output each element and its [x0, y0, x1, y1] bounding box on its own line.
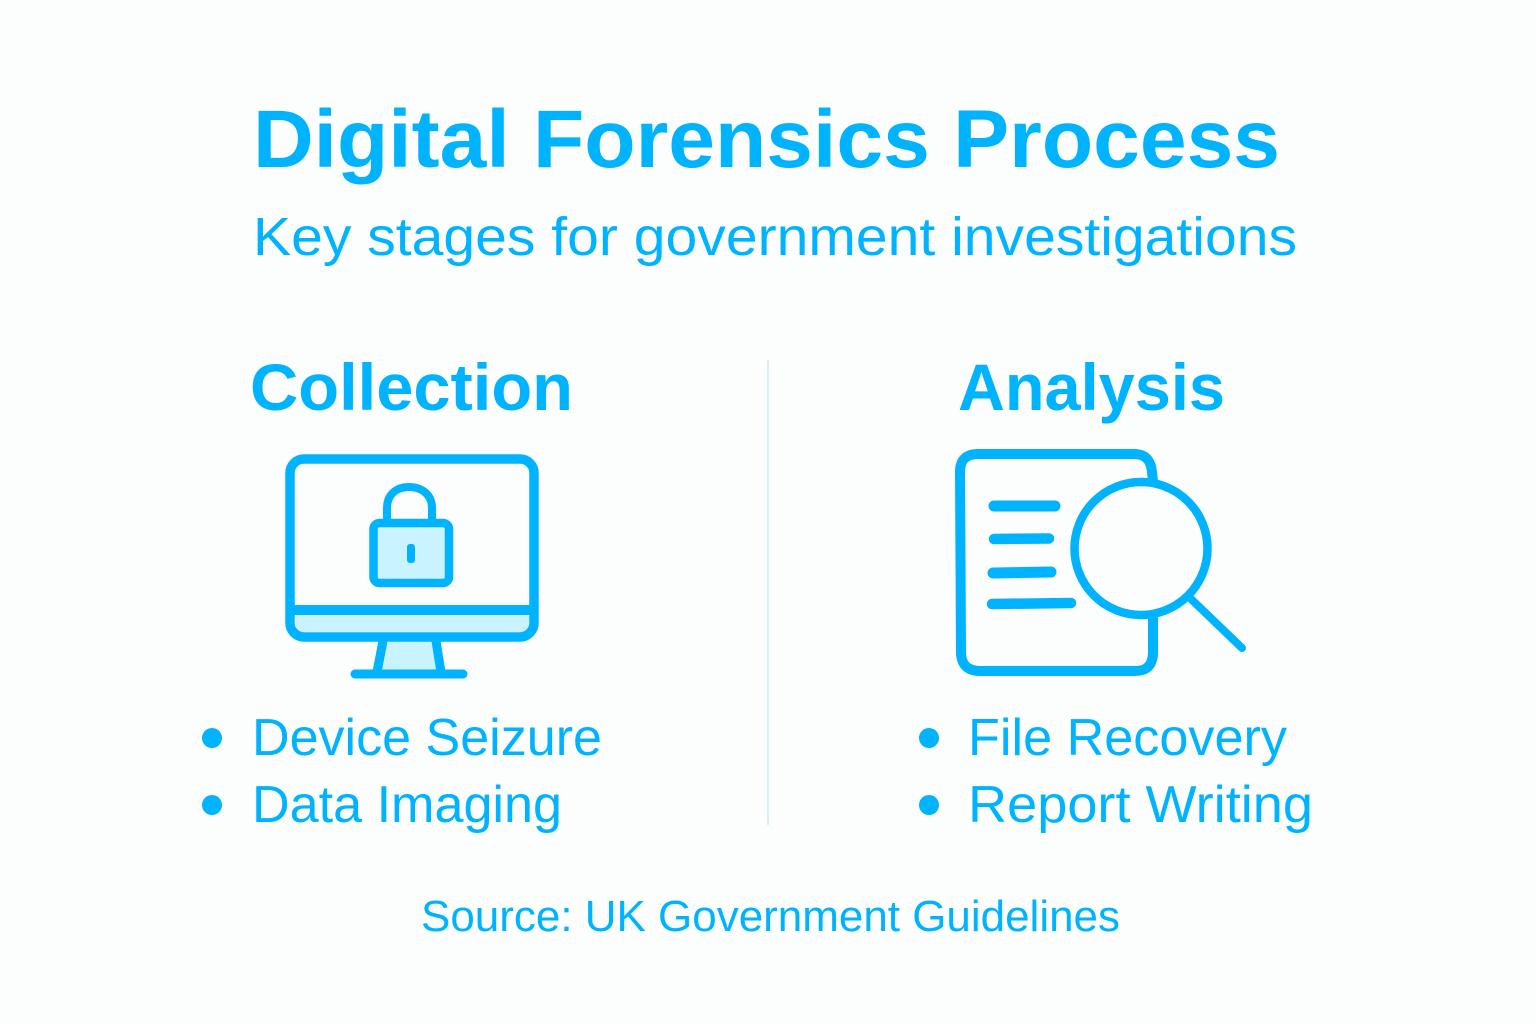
panel: collection	[202, 350, 602, 834]
bullet list: collection	[202, 709, 602, 834]
heading: collection: Collection	[250, 350, 573, 424]
bullet list: analysis: File Recovery	[968, 709, 1287, 767]
bullet list: collection: Device Seizure	[252, 709, 602, 767]
subtitle: Key stages for government investigations	[253, 207, 1297, 267]
bullet list: analysis	[919, 709, 1313, 834]
panel: analysis	[919, 350, 1313, 834]
icon: monitor with padlock	[290, 459, 534, 674]
heading: analysis: Analysis	[958, 350, 1225, 424]
icon: document with magnifying glass	[960, 454, 1242, 671]
bullet list: collection: Data Imaging	[252, 776, 562, 834]
source note: Source: UK Government Guidelines	[421, 892, 1120, 941]
bullet list: analysis: Report Writing	[968, 776, 1313, 834]
title: Digital Forensics Process	[253, 94, 1280, 185]
